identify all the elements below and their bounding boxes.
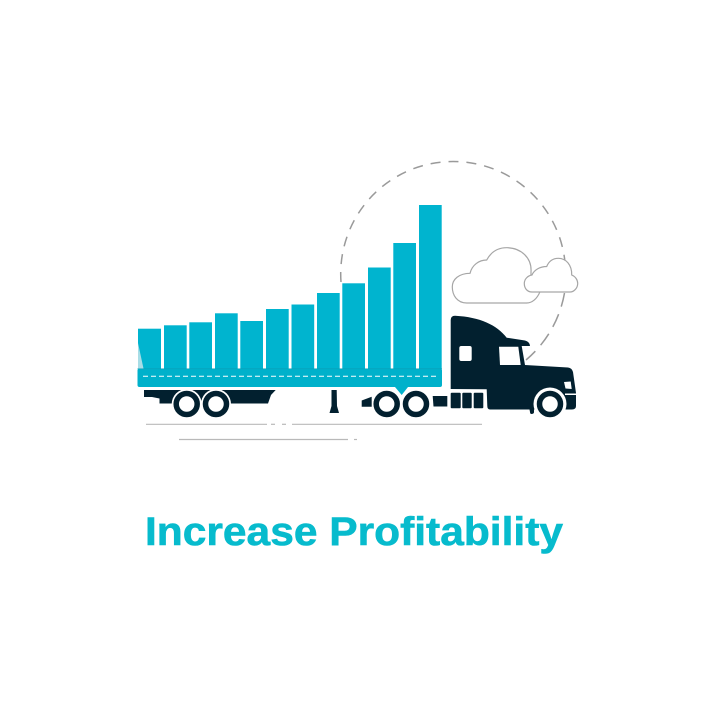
truck cab	[451, 316, 577, 414]
bar chart	[138, 205, 442, 370]
connector bar	[433, 396, 447, 406]
cab front window	[499, 347, 521, 365]
cab side window	[459, 346, 472, 361]
rear fender	[362, 397, 372, 407]
front bumper notch	[565, 394, 577, 395]
trailer platform	[138, 368, 442, 395]
wheels	[176, 394, 560, 414]
title: Increase Profitability	[145, 510, 564, 554]
icon: small cloud	[524, 258, 578, 292]
fuel tank steps	[451, 393, 483, 408]
trailer underside	[144, 390, 276, 404]
icon: large cloud	[452, 248, 540, 303]
headlight	[564, 382, 572, 389]
road lines	[146, 424, 482, 440]
wheel arches	[172, 388, 566, 420]
landing gear	[330, 390, 339, 413]
dashed circle arc	[341, 161, 565, 360]
